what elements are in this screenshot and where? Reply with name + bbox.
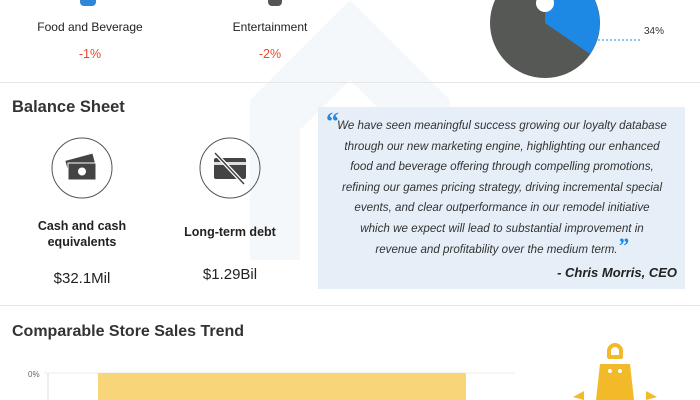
- quote panel: events, and clear outperformance in our remodel initiative: [354, 201, 650, 214]
- stat: cash: Cash and cash: [38, 219, 126, 233]
- icon: cash: [52, 138, 112, 198]
- stat: food and beverage: Food and Beverage: [37, 20, 143, 34]
- quote panel: refining our games pricing strategy, driving incremental special: [342, 181, 662, 194]
- icon: debt card: [200, 138, 260, 198]
- quote panel: through our new marketing engine, highlighting our enhanced: [344, 140, 660, 153]
- quote panel: - Chris Morris, CEO: [557, 265, 677, 280]
- quote panel: “: [326, 107, 339, 136]
- stat: cash: equivalents: [48, 235, 116, 249]
- quote panel: food and beverage offering through compelling promotions,: [350, 160, 654, 173]
- quote panel: which we expect will lead to substantial improvement in: [360, 222, 644, 235]
- stat: food and beverage: [37, 20, 143, 61]
- background watermark: [250, 0, 450, 260]
- quote panel: [318, 107, 685, 289]
- icon: food: [80, 0, 96, 6]
- bar chart: [28, 370, 515, 400]
- stat: long-term debt: $1.29Bil: [203, 266, 257, 283]
- stat: entertainment: -2%: [259, 47, 281, 61]
- stat: cash: [38, 219, 126, 287]
- icon: entertainment: [268, 0, 282, 6]
- quote panel: revenue and profitability over the medium term.”: [375, 233, 629, 258]
- icon: shopping bag: [573, 343, 657, 400]
- stat: cash: $32.1Mil: [54, 270, 110, 287]
- pie chart: [490, 0, 664, 78]
- heading: balance sheet: Balance Sheet: [12, 98, 125, 116]
- heading: comparable store sales trend: Comparable Store Sales Trend: [12, 323, 244, 340]
- bar chart: 0%: [28, 370, 40, 379]
- quote panel: We have seen meaningful success growing our loyalty database: [337, 119, 667, 132]
- stat: long-term debt: Long-term debt: [184, 225, 276, 239]
- stat: entertainment: [233, 20, 308, 61]
- stat: entertainment: Entertainment: [233, 20, 307, 34]
- stat: food and beverage: -1%: [79, 47, 101, 61]
- pie chart: 34%: [644, 26, 664, 37]
- stat: long-term debt: [184, 225, 276, 283]
